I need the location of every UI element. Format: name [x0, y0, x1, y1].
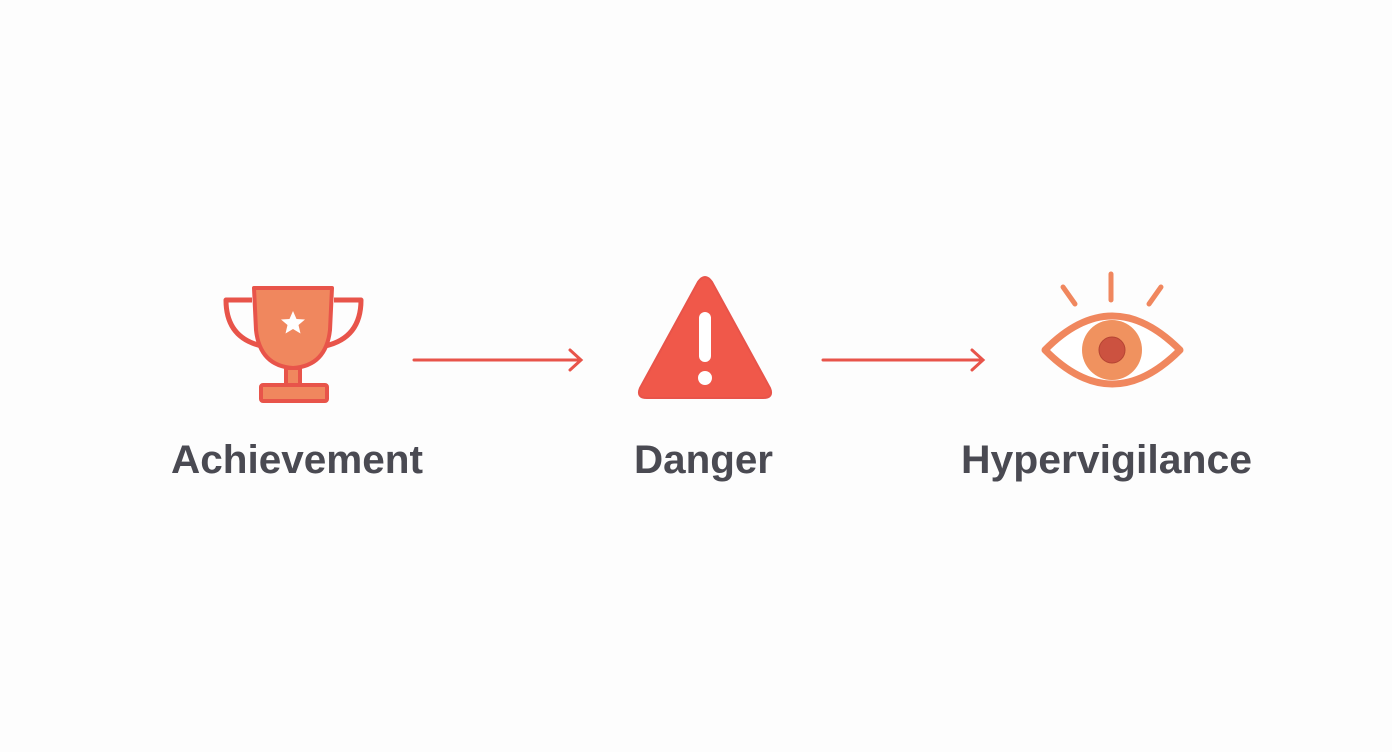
label: Achievement: Achievement	[171, 438, 423, 482]
label: Hypervigilance: Hypervigilance	[961, 438, 1252, 482]
label: Danger: Danger	[634, 438, 773, 482]
icon: eye	[1045, 274, 1180, 384]
arrow 2	[823, 350, 983, 370]
icon: warning triangle	[639, 277, 771, 398]
icon: trophy	[226, 288, 361, 401]
arrow 1	[414, 350, 581, 370]
